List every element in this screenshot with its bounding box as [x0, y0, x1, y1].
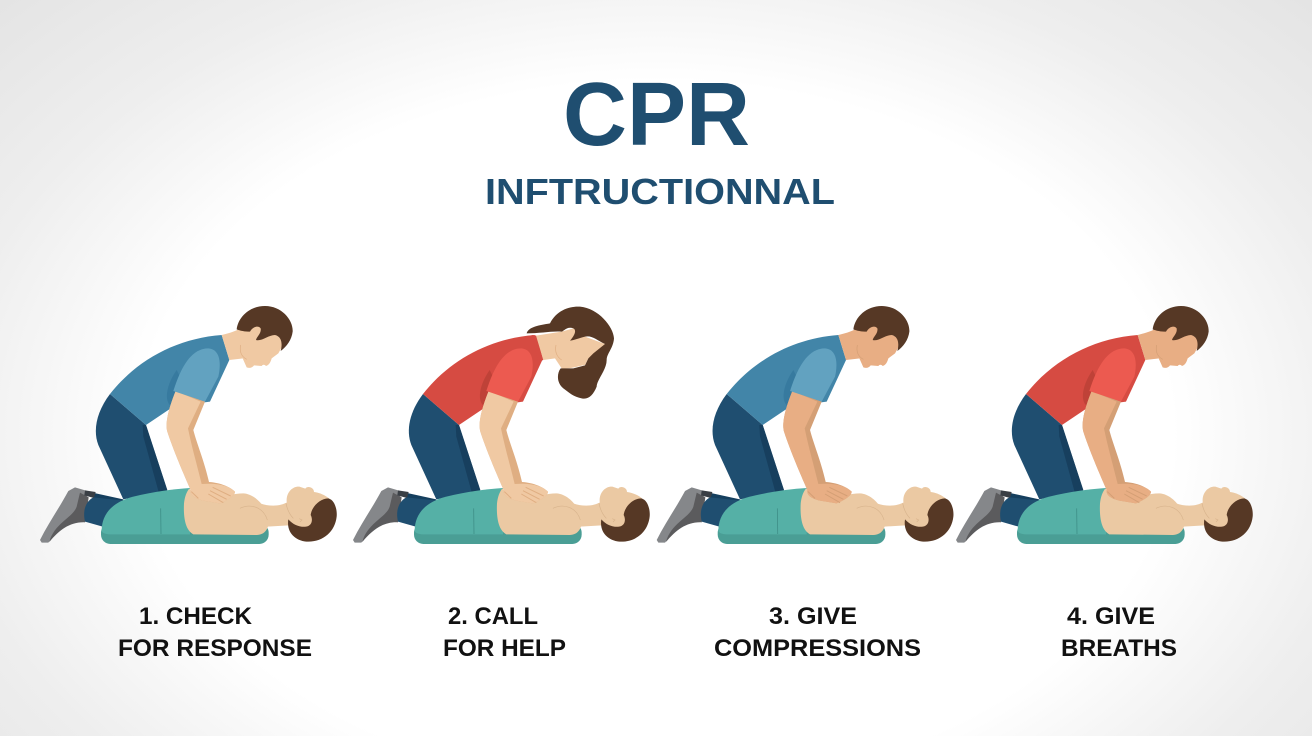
rescuer head [1138, 306, 1209, 368]
rescuer body [956, 335, 1145, 543]
rescuer arm [167, 348, 235, 503]
label: step 2: 2. CALL [448, 603, 538, 630]
victim [101, 487, 337, 544]
label: step 4: BREATHS [1061, 635, 1177, 662]
rescuer body [353, 335, 542, 543]
rescuer arm [480, 348, 548, 503]
rescuer arm [1083, 348, 1151, 503]
panel: step 2 illustration [353, 307, 650, 544]
label: step 1 [118, 603, 312, 662]
subtitle: INFTRUCTIONNAL [485, 171, 835, 212]
label: step 1: 1. CHECK [139, 603, 253, 630]
rescuer body [657, 335, 846, 543]
victim [414, 487, 650, 544]
label: step 4 [1061, 603, 1177, 662]
label: step 4: 4. GIVE [1067, 603, 1155, 630]
rescuer head with long hair [527, 307, 614, 399]
label: step 3 [714, 603, 921, 662]
panel: step 1 illustration [40, 306, 337, 544]
label: step 3: 3. GIVE [769, 603, 857, 630]
rescuer head [838, 306, 909, 368]
panel: step 3 illustration [657, 306, 953, 544]
label: step 1: FOR RESPONSE [118, 635, 312, 662]
victim [718, 487, 953, 544]
rescuer head [222, 306, 293, 368]
label: step 2: FOR HELP [443, 635, 566, 662]
label: step 3: COMPRESSIONS [714, 635, 921, 662]
panel: step 4 illustration [956, 306, 1253, 544]
rescuer arm [783, 348, 852, 503]
title: CPR [563, 65, 750, 165]
rescuer body [40, 335, 229, 543]
victim [1017, 487, 1253, 544]
label: step 2 [443, 603, 566, 662]
